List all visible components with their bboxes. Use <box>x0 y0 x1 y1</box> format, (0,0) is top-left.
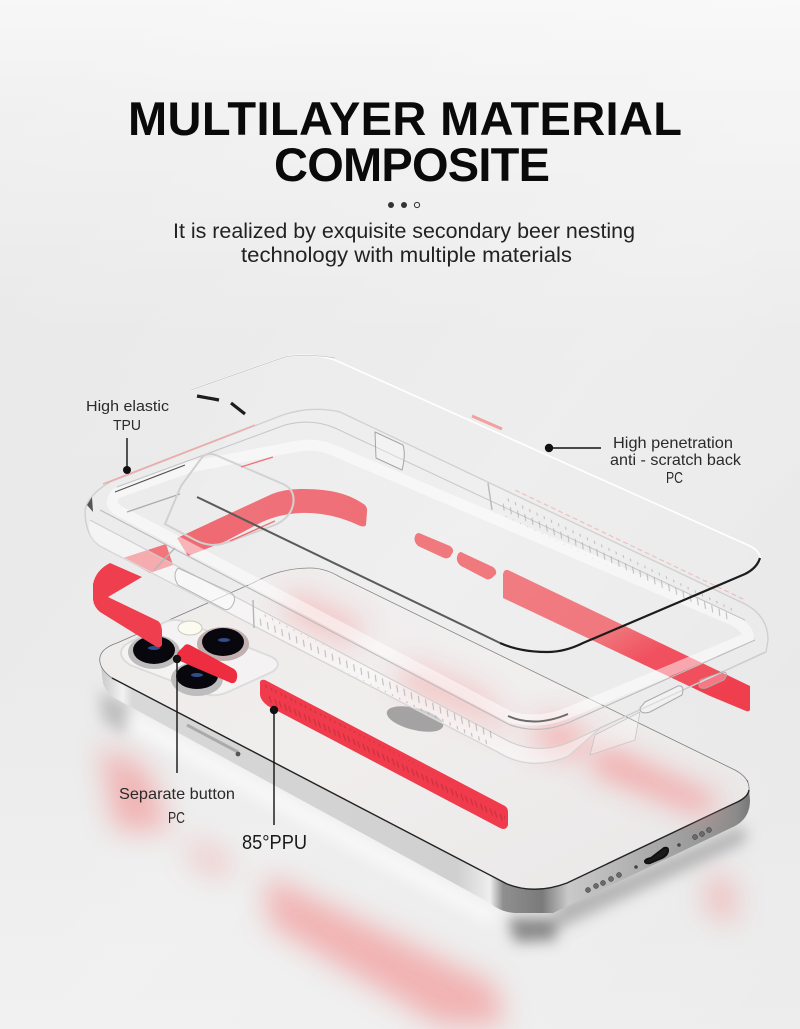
side button on case <box>375 432 404 470</box>
speaker holes left <box>586 872 622 892</box>
case inner line <box>117 422 745 620</box>
camera bump <box>121 620 278 695</box>
far side pink line <box>515 490 745 600</box>
faded left segment <box>123 544 173 573</box>
lens 3 <box>171 662 223 696</box>
dark edge of back surface <box>112 678 749 889</box>
case outer shell <box>85 409 768 763</box>
callout: back PC: PC <box>666 470 683 487</box>
flash <box>178 621 202 635</box>
red frame pieces <box>93 489 750 711</box>
dark rim corner <box>508 714 568 722</box>
strip body <box>260 680 508 829</box>
side switch <box>187 725 238 752</box>
title: MULTILAYER MATERIAL <box>128 92 682 145</box>
long side strip <box>503 570 750 711</box>
case side face near <box>89 520 766 763</box>
pagination dots <box>388 202 420 208</box>
left corner shadow <box>87 497 93 512</box>
plate body <box>190 355 760 653</box>
camera cutout red accents <box>230 457 275 541</box>
case rim <box>112 445 748 720</box>
charging port <box>645 848 668 863</box>
camera cutout <box>165 454 294 545</box>
side button notch <box>236 752 240 756</box>
plate notch shadows <box>197 396 245 414</box>
grip texture far side <box>500 497 735 622</box>
pill button 2 <box>457 552 496 579</box>
callout: back PC: anti - scratch back <box>610 452 742 469</box>
pink tint on phone back <box>285 590 720 815</box>
title: COMPOSITE <box>274 138 550 191</box>
screw <box>677 843 681 847</box>
bottom side face <box>590 712 640 755</box>
pill button 1 <box>414 533 453 558</box>
solid red L piece <box>93 563 162 647</box>
callout: separate button PC: Separate button <box>119 786 235 803</box>
plate top-left edge <box>191 355 335 390</box>
grip texture near side <box>255 612 495 746</box>
case clear posts <box>154 483 492 628</box>
title <box>128 92 682 191</box>
callout: 85 PPU <box>242 706 307 854</box>
callout: high elastic TPU: TPU <box>113 417 141 434</box>
callout: 85 PPU: 85°PPU <box>242 832 307 854</box>
phone back surface <box>100 568 749 889</box>
lens 2 <box>197 627 249 661</box>
subtitle: It is realized by exquisite secondary beer nesting <box>173 220 635 243</box>
clear PC back plate <box>190 355 760 653</box>
phone side frame <box>100 657 750 913</box>
callout: back PC: High penetration <box>613 435 733 452</box>
red tint line top <box>103 425 255 484</box>
phone reflection <box>100 690 745 942</box>
callout: high elastic TPU: High elastic <box>86 398 170 415</box>
phone <box>100 568 750 913</box>
plate left dark edge <box>197 497 500 643</box>
callout: back PC <box>545 435 742 487</box>
faded top arc <box>177 489 367 556</box>
clear TPU bumper case <box>85 409 768 763</box>
lens 1 <box>128 635 180 669</box>
volume button on case <box>175 568 235 610</box>
apple logo window <box>384 701 446 737</box>
callout: high elastic TPU <box>86 398 170 474</box>
subtitle <box>173 220 635 267</box>
screw <box>634 865 638 869</box>
pink reflections on surface <box>100 745 735 1025</box>
case front edge line <box>90 520 765 748</box>
case front rim highlight <box>100 510 755 729</box>
plate top edge highlight <box>191 355 760 562</box>
inner grey line left <box>127 494 180 512</box>
bottom port openings on case <box>640 672 727 713</box>
camera button piece <box>177 644 237 683</box>
callout: separate button PC: PC <box>168 810 185 827</box>
red PPU strip <box>260 680 508 829</box>
camera module <box>121 620 278 696</box>
strip chevron texture <box>264 684 505 824</box>
callout: separate button PC <box>119 655 235 827</box>
speaker holes right <box>692 828 712 840</box>
plate red mark <box>472 416 502 429</box>
subtitle: technology with multiple materials <box>241 244 572 267</box>
inner dark line left <box>115 465 185 492</box>
plate bottom black edge <box>500 558 760 652</box>
